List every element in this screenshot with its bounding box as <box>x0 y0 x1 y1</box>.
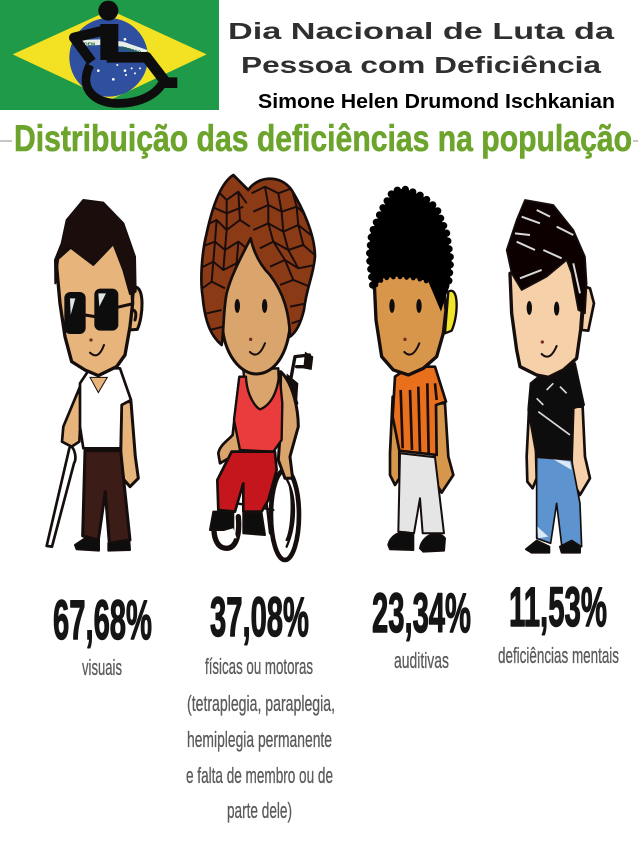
stat: 37,08% físicas ou motoras: físicas ou motoras <box>205 654 313 679</box>
stat: 37,08% físicas ou motoras: e falta de membro ou de <box>186 763 333 788</box>
stat: 37,08% físicas ou motoras: hemiplegia permanente <box>187 727 332 752</box>
stat: 23,34% auditivas: auditivas <box>394 648 449 673</box>
stat: 37,08% físicas ou motoras: (tetraplegia, paraplegia, <box>187 691 335 716</box>
heading: Dia Nacional de Luta da Pessoa com Deficiência <box>228 18 614 78</box>
stat: 11,53% deficiências mentais <box>498 575 619 668</box>
stat: 67,68% visuais: visuais <box>82 655 122 680</box>
character: man with afro and hearing aid <box>368 188 457 552</box>
stat: 37,08% físicas ou motoras <box>186 585 335 823</box>
stat: 23,34% auditivas <box>372 581 471 673</box>
stat: 23,34% auditivas: 23,34% <box>372 581 471 644</box>
icon: Brazilian flag with wheelchair symbol: GRESSO <box>120 45 142 56</box>
icon: Brazilian flag with wheelchair symbol: DEM <box>84 41 95 47</box>
icon: Brazilian flag with wheelchair symbol <box>0 0 219 110</box>
character: man with sunglasses and cane <box>47 200 142 551</box>
character: woman with curly hair in wheelchair <box>200 175 317 560</box>
heading: Dia Nacional de Luta da Pessoa com Deficiência: Dia Nacional de Luta da <box>228 18 614 44</box>
stat: 67,68% visuais <box>53 588 152 680</box>
character: man with spiky black hair <box>507 200 594 553</box>
author name: Simone Helen Drumond Ischkanian <box>258 91 615 113</box>
stat: 37,08% físicas ou motoras: parte dele) <box>227 798 292 823</box>
heading: Dia Nacional de Luta da Pessoa com Deficiência: Pessoa com Deficiência <box>241 52 601 78</box>
stat: 67,68% visuais: 67,68% <box>53 588 152 651</box>
stat: 37,08% físicas ou motoras: 37,08% <box>210 585 309 648</box>
